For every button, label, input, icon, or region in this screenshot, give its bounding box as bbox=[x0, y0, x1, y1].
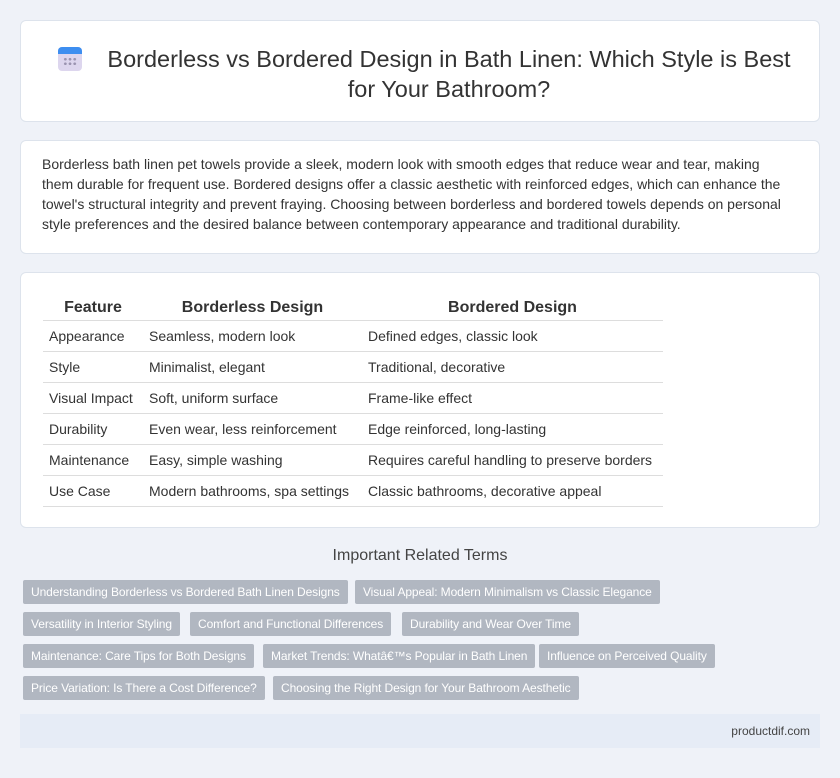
text: Versatility in Interior Styling bbox=[31, 617, 172, 631]
panel: description bbox=[20, 140, 820, 254]
text: Comfort and Functional Differences bbox=[198, 617, 383, 631]
table: Appearance bbox=[49, 328, 125, 344]
table: Visual Impact bbox=[49, 390, 133, 406]
footer bbox=[20, 714, 820, 748]
table bbox=[43, 299, 663, 507]
table: Soft, uniform surface bbox=[149, 390, 278, 406]
footer: productdif.com bbox=[731, 724, 810, 738]
table: Easy, simple washing bbox=[149, 452, 283, 468]
text: Influence on Perceived Quality bbox=[547, 649, 707, 663]
tags bbox=[23, 580, 715, 700]
table: Maintenance bbox=[49, 452, 129, 468]
panel: comparison table bbox=[20, 272, 820, 528]
text block: Borderless bath linen pet towels provide a sleek, modern look with smooth edges that reduce wear and tear, making them durable for frequent use. Bordered designs offer a classic aesthetic with reinforced edges, which can enhance the towel's structural integrity and prevent fraying. Choosing between borderless and bordered towels depends on personal style preferences and the desired balance between contemporary appearance and traditional durability. bbox=[42, 156, 781, 232]
table: Requires careful handling to preserve borders bbox=[368, 452, 652, 468]
table: Classic bathrooms, decorative appeal bbox=[368, 483, 601, 499]
table: Durability bbox=[49, 421, 107, 437]
table: Even wear, less reinforcement bbox=[149, 421, 337, 437]
table: Edge reinforced, long-lasting bbox=[368, 421, 546, 437]
heading: related terms: Important Related Terms bbox=[333, 547, 507, 564]
table: Feature bbox=[64, 299, 122, 316]
heading: Borderless vs Bordered Design in Bath Linen: Which Style is Best for Your Bathroom? bbox=[107, 46, 791, 102]
text: Price Variation: Is There a Cost Difference? bbox=[31, 681, 257, 695]
panel: title bbox=[20, 20, 820, 122]
text: Durability and Wear Over Time bbox=[410, 617, 571, 631]
table: Borderless Design bbox=[182, 299, 323, 316]
table: Style bbox=[49, 359, 80, 375]
text: Market Trends: Whatâ€™s Popular in Bath Linen bbox=[271, 649, 527, 663]
table: Bordered Design bbox=[448, 299, 577, 316]
text: Visual Appeal: Modern Minimalism vs Classic Elegance bbox=[363, 585, 652, 599]
text: Understanding Borderless vs Bordered Bath Linen Designs bbox=[31, 585, 340, 599]
table: Modern bathrooms, spa settings bbox=[149, 483, 349, 499]
table: Traditional, decorative bbox=[368, 359, 505, 375]
text: Choosing the Right Design for Your Bathroom Aesthetic bbox=[281, 681, 571, 695]
icon: calendar bbox=[58, 47, 82, 71]
table: Frame-like effect bbox=[368, 390, 472, 406]
text: Maintenance: Care Tips for Both Designs bbox=[31, 649, 246, 663]
table: Use Case bbox=[49, 483, 110, 499]
table: Minimalist, elegant bbox=[149, 359, 265, 375]
table: Defined edges, classic look bbox=[368, 328, 538, 344]
table: Seamless, modern look bbox=[149, 328, 295, 344]
